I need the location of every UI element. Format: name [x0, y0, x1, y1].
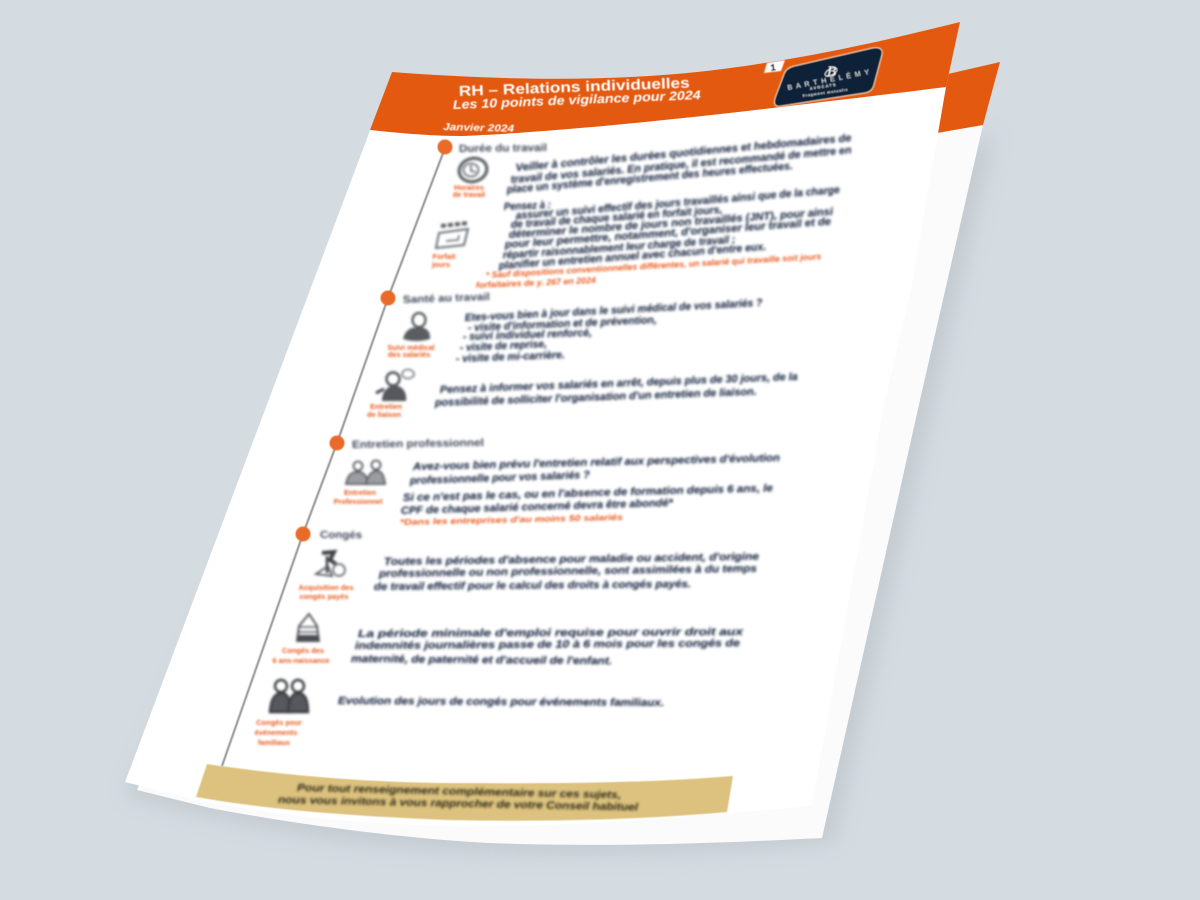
note: forfait jours	[476, 251, 822, 290]
text: entretien de liaison: possibilité de solliciter l'organisation d'un entretien de liaison.	[434, 386, 757, 409]
text: perspectives d'évolution: Si ce n'est pas le cas, ou en l'absence de formation depuis 6 ans, le	[403, 482, 773, 504]
text: contrôle des durées: travail de vos salariés. En pratique, il est recommandé de mettre en	[510, 144, 852, 186]
marker 4	[296, 526, 310, 542]
label: entretien professionnel	[334, 488, 382, 506]
section 4: congés	[255, 526, 759, 747]
date: Janvier 2024	[443, 122, 515, 135]
header title	[453, 76, 701, 112]
text: pensez à: assurer un suivi effectif des jours travaillés ainsi que de la charge	[515, 184, 840, 222]
heading: santé au travail: Santé au travail	[403, 291, 490, 306]
label: forfait jours: jours	[431, 260, 450, 269]
label: entretien professionnel: Professionnel	[334, 497, 382, 506]
label: congés pour événements familiaux: événements	[255, 728, 297, 737]
text: suivi médical: - suivi individuel renforcé,	[463, 327, 592, 343]
logo: AVOCATS	[810, 83, 836, 91]
text: perspectives d'évolution: professionnelle pour vos salariés ?	[409, 469, 591, 487]
text: acquisition: de travail effectif pour le calcul des droits à congés payés.	[374, 578, 691, 593]
label: congés naissance	[272, 646, 330, 665]
heading: congés: Congés	[320, 529, 362, 541]
text: suivi médical: - visite de mi-carrière.	[456, 349, 565, 365]
text: entretien de liaison	[434, 371, 798, 409]
label: entretien de liaison: de liaison	[367, 410, 402, 419]
front sheet	[125, 22, 960, 826]
section 2: santé au travail	[367, 290, 798, 419]
text: contrôle des durées	[505, 132, 852, 196]
text: événements familiaux: Evolution des jours de congés pour événements familiaux.	[338, 695, 664, 709]
icon: person	[403, 313, 430, 341]
label: forfait jours	[431, 252, 456, 269]
label: horaires de travail	[453, 183, 485, 199]
text: entretien de liaison: Pensez à informer vos salariés en arrêt, depuis plus de 30 jours, de la	[440, 371, 798, 396]
page number tag: 1	[770, 62, 776, 73]
icon: clock	[457, 155, 489, 185]
label: suivi médical: Suivi médical	[387, 343, 435, 352]
marker 3	[330, 436, 344, 450]
text: acquisition: professionnelle ou non professionnelle, sont assimilées à du temps	[378, 563, 757, 580]
text: pensez à: de travail de chaque salarié en forfait jours,	[510, 204, 723, 231]
text: suivi médical	[456, 297, 763, 365]
label: acquisition des congés payés	[298, 583, 354, 601]
section 1: durée du travail	[431, 132, 852, 290]
logo: B	[827, 64, 836, 80]
label: congés pour événements familiaux: familiaux	[258, 738, 291, 747]
timeline line	[222, 148, 445, 766]
footer text	[278, 782, 639, 814]
label: congés pour événements familiaux: Congés pour	[256, 718, 302, 727]
icon: discussion	[376, 370, 414, 401]
marker 2	[380, 290, 396, 306]
back sheet	[125, 62, 1000, 854]
label: acquisition des congés payés: Acquisition des	[298, 583, 354, 592]
header title: Les 10 points de vigilance pour 2024	[453, 88, 701, 112]
text: pensez à: déterminer le nombre de jours non travaillés (JNT), pour ainsi	[508, 206, 835, 241]
label: suivi médical: des salariés	[388, 350, 430, 359]
text: pensez à: Pensez à :	[504, 199, 551, 213]
label: congés naissance: Congés des	[282, 646, 324, 655]
label: entretien de liaison: Entretien	[370, 402, 403, 411]
logo: BARTHÉLÉMY	[787, 67, 870, 92]
heading: entretien professionnel: Entretien professionnel	[352, 437, 484, 451]
footer banner	[196, 764, 733, 821]
text: acquisition	[374, 551, 759, 593]
heading: durée du travail: Durée du travail	[459, 142, 547, 155]
label: forfait jours: Forfait	[432, 252, 456, 261]
text: pensez à: répartir raisonnablement leur charge de travail ;	[502, 234, 736, 261]
header title: RH – Relations individuelles	[459, 76, 690, 100]
label: acquisition des congés payés: congés payés	[300, 592, 348, 601]
text: contrôle des durées: Veiller à contrôler les durées quotidiennes et hebdomadaires de	[515, 132, 852, 174]
note: forfait jours: forfaitaires de y. 267 en 2024	[476, 275, 596, 290]
footer text: nous vous invitons à vous rapprocher de votre Conseil habituel	[278, 794, 639, 814]
page number tag	[764, 60, 785, 73]
marker 1	[438, 140, 452, 154]
text: perspectives d'évolution: Avez-vous bien prévu l'entretien relatif aux perspectives d'évolution	[412, 452, 780, 473]
icon: two people	[346, 460, 385, 484]
text: suivi médical: - visite d'information et de prévention,	[468, 314, 657, 334]
label: congés naissance: 6 ans-naissance	[272, 656, 330, 665]
text: pensez à: planifier un entretien annuel avec chacun d'entre eux.	[497, 241, 767, 272]
icon: baby bottle	[297, 614, 319, 641]
text: suivi médical: - visite de reprise,	[460, 338, 547, 354]
label: congés pour événements familiaux	[255, 718, 302, 747]
text: indemnités journalières: indemnités journalières passe de 10 à 6 mois pour les congés de	[355, 637, 740, 652]
text: pensez à: pour leur permettre, notamment, d'organiser leur travail et de	[503, 216, 832, 251]
label: suivi médical	[387, 343, 435, 359]
text: suivi médical: Etes-vous bien à jour dans le suivi médical de vos salariés ?	[465, 297, 763, 324]
icon: calendar	[436, 223, 468, 248]
text: indemnités journalières: La période minimale d'emploi requise pour ouvrir droit aux	[358, 626, 745, 640]
text: contrôle des durées: place un système d'enregistrement des heures effectuées.	[505, 160, 793, 196]
logo: Fragment mutualis	[803, 88, 848, 98]
icon: family	[270, 680, 308, 712]
label: entretien professionnel: Entretien	[344, 488, 377, 497]
section 3: entretien professionnel	[330, 436, 780, 527]
label: horaires de travail: Horaires	[454, 183, 484, 192]
text: indemnités journalières: maternité, de paternité et d'accueil de l'enfant.	[351, 653, 612, 667]
label: entretien de liaison	[367, 402, 403, 419]
footer text: Pour tout renseignement complémentaire sur ces sujets,	[297, 782, 621, 801]
orange header band	[370, 22, 960, 136]
text: acquisition: Toutes les périodes d'absence pour maladie ou accident, d'origine	[384, 551, 759, 568]
icon: palm tree	[316, 552, 345, 576]
note: entreprises: *Dans les entreprises d'au moins 50 salariés	[400, 512, 623, 527]
text: perspectives d'évolution	[401, 452, 780, 517]
text: pensez à	[497, 184, 840, 272]
text: indemnités journalières	[351, 626, 745, 667]
note: forfait jours: * Sauf dispositions conventionnelles différentes, un salarié qui travaille soit jours	[486, 251, 822, 280]
logo	[774, 48, 882, 106]
label: horaires de travail: de travail	[453, 190, 485, 199]
text: perspectives d'évolution: CPF de chaque salarié concerné devra être abondé*	[401, 497, 674, 517]
